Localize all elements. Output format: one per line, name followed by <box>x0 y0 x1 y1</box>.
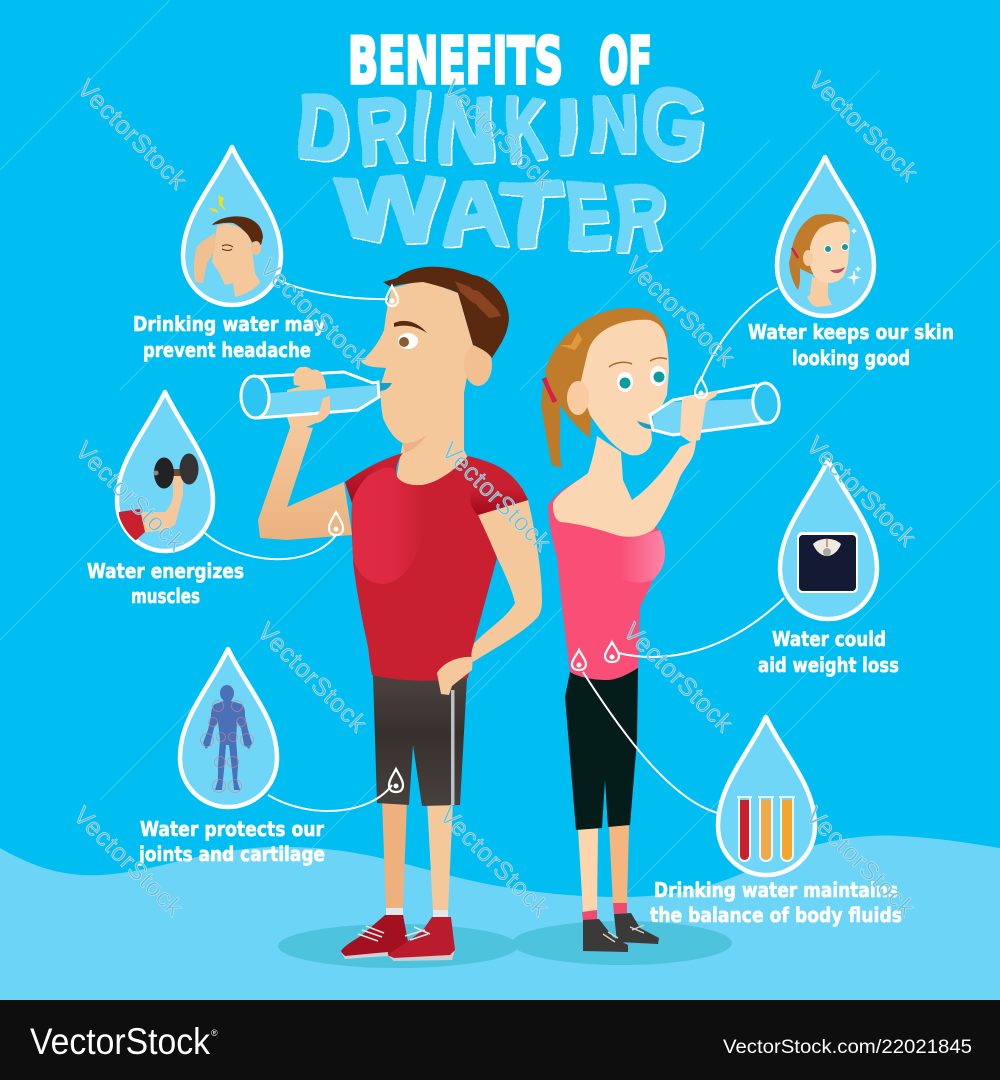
bottle rim <box>240 375 270 419</box>
woman pants <box>565 668 638 830</box>
caption: headache: Drinking water may <box>133 312 325 336</box>
title: water: R <box>612 168 664 270</box>
woman top <box>548 481 665 680</box>
woman neck and chest and arm <box>553 436 696 537</box>
caption: weight loss: aid weight loss <box>758 653 899 677</box>
caption: joints: joints and cartilage <box>138 842 325 866</box>
arm <box>140 475 183 532</box>
icon: man with headache <box>194 195 263 297</box>
watermarks: VectorStock <box>803 66 923 187</box>
woman left leg <box>578 828 598 913</box>
man left shoe <box>341 915 408 958</box>
icon: test tubes <box>737 797 795 861</box>
title: water <box>336 158 664 270</box>
man bottle <box>240 372 379 419</box>
caption: weight loss <box>758 627 899 677</box>
title: drinking: R <box>356 80 406 180</box>
body marker inner dots <box>334 298 704 788</box>
watermarks: VectorStock <box>438 74 558 195</box>
woman hair tie <box>544 378 555 402</box>
man socks <box>386 908 448 918</box>
neck <box>807 277 832 307</box>
dumbbell <box>174 469 180 476</box>
caption: headache <box>133 312 325 362</box>
title: drinking <box>298 75 705 180</box>
watermarks: VectorStock <box>252 617 372 738</box>
woman socks <box>582 903 627 921</box>
ponytail <box>789 250 800 290</box>
man mouth water <box>378 383 392 391</box>
woman laces <box>603 925 644 942</box>
man ear <box>464 344 492 386</box>
left sleeve shade <box>345 462 385 503</box>
drop: skin <box>777 157 874 316</box>
title: benefits of: OF <box>599 25 652 99</box>
drop: muscles <box>117 392 213 551</box>
man hair <box>383 267 509 358</box>
footer bar <box>0 1000 1000 1080</box>
watermarks: VectorStock <box>254 253 374 374</box>
footer url: VectorStock.com/22021845 <box>723 1037 972 1058</box>
woman hair highlight <box>559 328 590 350</box>
watermarks: VectorStock <box>800 801 920 922</box>
eyes <box>824 246 832 252</box>
woman bottle <box>650 382 781 435</box>
title: water: A <box>443 162 511 264</box>
title: water: E <box>564 165 608 267</box>
title: water: W <box>336 158 444 260</box>
watermarks: VectorStock <box>618 617 738 738</box>
ground wave <box>0 835 1000 1000</box>
caption: joints: Water protects our <box>140 817 324 841</box>
bottle water <box>653 398 777 435</box>
drop: headache <box>183 147 281 305</box>
caption: skin: Water keeps our skin <box>748 320 954 344</box>
ear <box>251 241 261 255</box>
shoe soles <box>341 950 455 961</box>
title: drinking: K <box>503 80 547 180</box>
face <box>212 224 260 297</box>
man shirt <box>345 453 528 681</box>
woman hair <box>545 308 668 438</box>
body markers: small drops <box>329 286 707 792</box>
hair tie <box>792 248 798 258</box>
woman left shoe <box>583 919 628 952</box>
ear <box>803 250 813 266</box>
man arm on hip <box>470 500 542 662</box>
man hair highlight <box>455 281 501 318</box>
man right leg <box>427 800 453 912</box>
neck shadow <box>402 423 433 453</box>
face <box>810 222 850 283</box>
title: drinking: G <box>645 75 705 175</box>
caption: joints <box>138 817 325 866</box>
caption: skin: looking good <box>792 346 910 370</box>
man palm behind bottle <box>287 380 330 433</box>
watermarks: VectorStock <box>434 801 554 922</box>
shirt chest highlight <box>352 468 425 584</box>
watermarks: VectorStock <box>620 251 740 372</box>
footer registered mark: ® <box>211 1028 218 1038</box>
icon: woman face <box>789 214 861 307</box>
man shorts <box>373 675 467 806</box>
man eyebrow <box>394 321 427 333</box>
hand on forehead <box>194 233 215 283</box>
caption: muscles <box>87 559 244 608</box>
sparkles <box>847 228 861 285</box>
woman ponytail <box>541 385 562 468</box>
floor shadows <box>278 921 732 968</box>
watermarks: VectorStock <box>70 436 190 557</box>
woman right shoe <box>614 913 659 944</box>
hair <box>791 214 850 275</box>
title: drinking: I <box>410 76 428 176</box>
man neck <box>395 385 468 490</box>
title: drinking: N <box>437 78 495 178</box>
title: benefits of: BENEFITS <box>348 25 563 99</box>
woman figure <box>541 308 781 952</box>
connector lines <box>205 278 784 813</box>
man figure <box>240 267 542 961</box>
man iris <box>399 337 409 347</box>
woman right leg <box>609 825 629 905</box>
watermarks: VectorStock <box>68 801 188 922</box>
bottle outline <box>650 385 766 435</box>
title: water: T <box>500 164 562 266</box>
caption: weight loss: Water could <box>772 627 886 651</box>
caption: muscles: Water energizes <box>87 559 244 583</box>
title: drinking: D <box>298 78 350 178</box>
man eye <box>398 333 418 349</box>
watermarks: VectorStock <box>801 431 921 552</box>
caption: headache: prevent headache <box>143 338 311 362</box>
woman face <box>580 320 669 455</box>
watermarks: VectorStock <box>72 74 192 195</box>
caption: skin <box>748 320 954 370</box>
man face <box>361 280 473 443</box>
bottle rim <box>751 382 781 424</box>
joint circles <box>200 700 254 792</box>
caption: fluids <box>650 878 902 927</box>
woman ear <box>567 381 589 415</box>
woman eyes <box>617 366 666 392</box>
icon: bathroom scale <box>797 532 858 593</box>
sleeve <box>119 509 145 541</box>
icon: arm with dumbbell <box>119 454 198 541</box>
caption: fluids: the balance of body fluids <box>650 903 902 927</box>
footer logo: VectorStock <box>30 1021 210 1062</box>
woman eyebrows <box>609 358 667 367</box>
mouth <box>830 267 845 273</box>
woman bust highlight <box>620 530 665 583</box>
caption: muscles: muscles <box>131 584 200 608</box>
icon: human body <box>203 685 252 790</box>
woman hand on bottle <box>680 390 719 442</box>
watermarks <box>68 66 923 922</box>
man thumb <box>316 396 330 423</box>
bottle outline <box>251 372 379 418</box>
woman mouth water <box>637 421 651 429</box>
right sleeve shade <box>470 488 528 515</box>
shoe laces <box>358 926 430 941</box>
drop: fluids <box>718 717 815 875</box>
man left leg <box>382 800 407 910</box>
drop: joints <box>180 649 277 807</box>
title: drinking: N <box>585 76 641 176</box>
drop: weight <box>780 460 877 619</box>
watermarks: VectorStock <box>436 436 556 557</box>
pain bolts <box>209 195 226 213</box>
man fingers <box>293 367 326 388</box>
hair <box>212 216 263 245</box>
title: drinking: I <box>558 78 576 178</box>
man hand at hip <box>437 657 473 695</box>
shorts stripe <box>451 690 454 805</box>
bottle water <box>245 385 379 417</box>
man drinking arm <box>258 425 352 540</box>
man right shoe <box>387 917 455 960</box>
closed eye <box>222 245 233 250</box>
caption: fluids: Drinking water maintains <box>654 878 898 902</box>
